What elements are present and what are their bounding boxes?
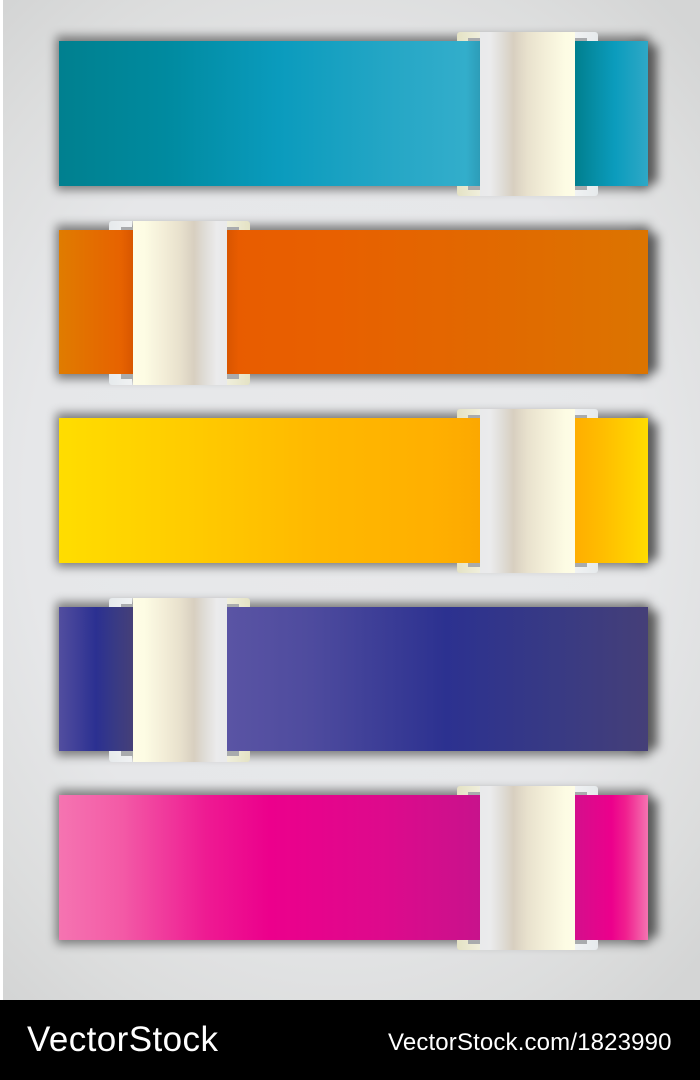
image reference: VectorStock.com/1823990 xyxy=(388,1029,672,1056)
footer bar xyxy=(0,1000,700,1080)
banner 3: yellow xyxy=(50,406,665,574)
banner 5: magenta xyxy=(50,783,665,950)
banner 1: teal xyxy=(50,30,665,197)
logo wordmark: VectorStock xyxy=(27,1020,218,1059)
banner 2: orange xyxy=(50,218,665,386)
banner 4: indigo xyxy=(50,595,665,763)
